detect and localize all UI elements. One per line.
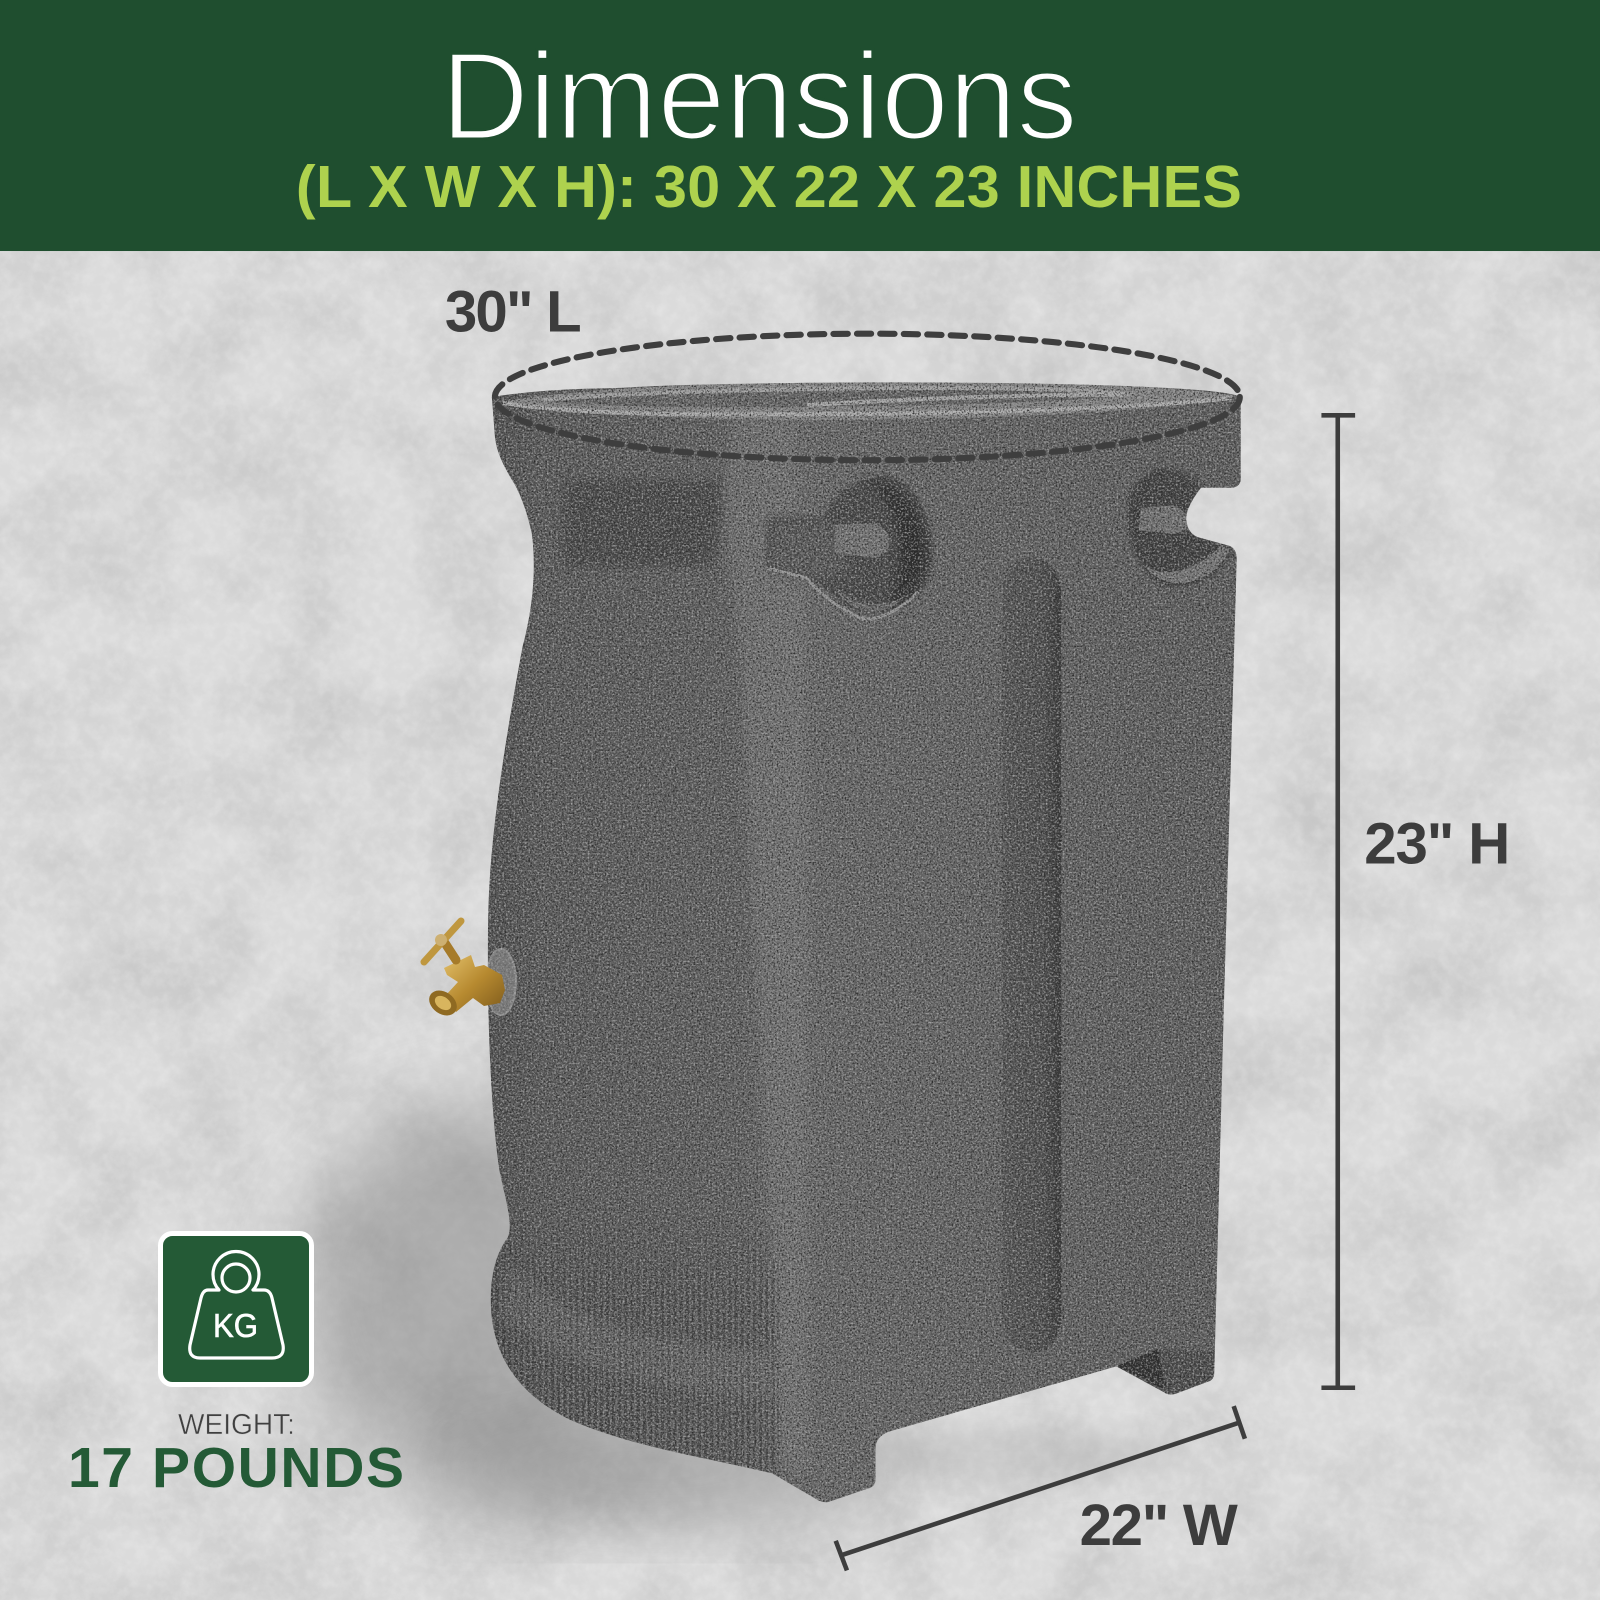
width label: 22" W: [1080, 1493, 1238, 1558]
length label: 30" L: [445, 280, 582, 345]
subtitle: (L X W X H): 30 X 22 X 23 INCHES: [296, 153, 1242, 220]
weight block: [68, 1234, 404, 1500]
height dimension line: [1321, 415, 1355, 1388]
title: Dimensions: [441, 27, 1078, 166]
icon text: KG: [213, 1307, 258, 1344]
ribbed base: [491, 1236, 778, 1477]
drop shadow: [296, 1102, 1194, 1516]
length dashed ellipse: [495, 334, 1240, 460]
foot shade: [1116, 1349, 1214, 1396]
handle bar: [424, 921, 461, 962]
hose end: [424, 985, 462, 1021]
faucet: [424, 921, 516, 1021]
long vertical groove: [1002, 557, 1061, 1353]
rain barrel: [480, 372, 1255, 1515]
width dimension line: [836, 1406, 1245, 1570]
left hole: [767, 476, 932, 619]
recessed left panel: [563, 480, 727, 566]
weight caption: WEIGHT:: [178, 1409, 295, 1441]
weight value: 17 POUNDS: [68, 1436, 404, 1500]
height label: 23" H: [1364, 811, 1510, 876]
rim opening: [500, 380, 1237, 420]
spout and body: [444, 955, 505, 1012]
handle stem: [443, 940, 456, 960]
corner strip: [722, 418, 808, 1469]
icon: kg weight: [161, 1234, 312, 1384]
washer: [486, 949, 516, 1015]
right hole: [1127, 468, 1232, 587]
header band: [0, 0, 1600, 251]
